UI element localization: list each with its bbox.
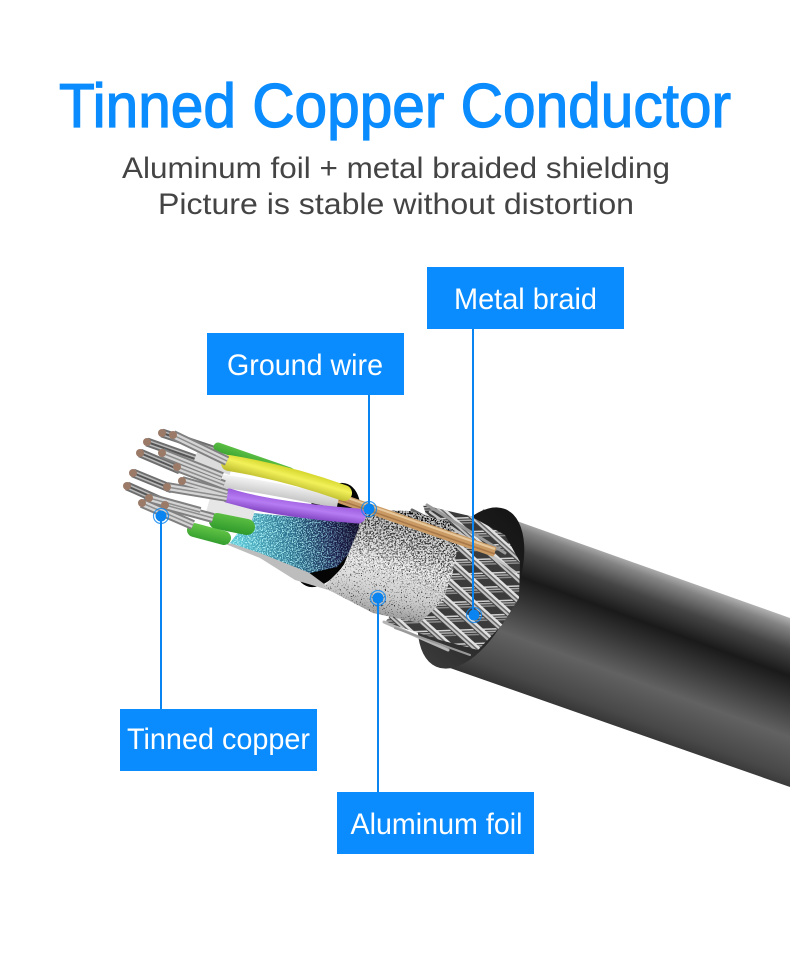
- inner opening of foil: [280, 473, 374, 597]
- callout: tinned copper: Tinned copper: [127, 723, 310, 756]
- title: Tinned Copper Conductor: [59, 72, 731, 141]
- strand copper tips: [123, 429, 186, 509]
- cable illustration: [123, 429, 790, 787]
- callout: aluminum foil: Aluminum foil: [350, 808, 522, 841]
- white wire: [222, 481, 338, 502]
- tinned copper strands back: [127, 433, 222, 505]
- aluminum foil sleeve: [323, 510, 458, 623]
- metal braid: [385, 505, 520, 650]
- subtitle: [122, 152, 670, 221]
- green wire upper: [218, 447, 290, 472]
- green wire lower: [217, 521, 247, 527]
- white stub upper: [196, 455, 232, 468]
- subtitle: Picture is stable without distortion: [158, 188, 634, 221]
- braid loose ends: [384, 505, 515, 655]
- yellow wire: [229, 463, 344, 493]
- subtitle: Aluminum foil + metal braided shielding: [122, 152, 670, 185]
- green wire bottom: [194, 530, 224, 538]
- foil tail: [223, 543, 335, 592]
- callout: tinned copper: [120, 508, 317, 771]
- callout: ground wire: Ground wire: [227, 349, 383, 382]
- callout: metal braid: Metal braid: [454, 283, 597, 316]
- purple wire: [229, 496, 358, 516]
- callout: metal braid: [427, 267, 624, 622]
- tinned copper strands front: [142, 435, 227, 525]
- inner shield speckle: [230, 513, 360, 573]
- callout: ground wire: [207, 333, 404, 516]
- ground wire copper: [339, 495, 495, 554]
- wires: [194, 447, 358, 538]
- white wire lower: [208, 505, 253, 517]
- callout: aluminum foil: [337, 590, 534, 854]
- outer black jacket: [396, 492, 790, 787]
